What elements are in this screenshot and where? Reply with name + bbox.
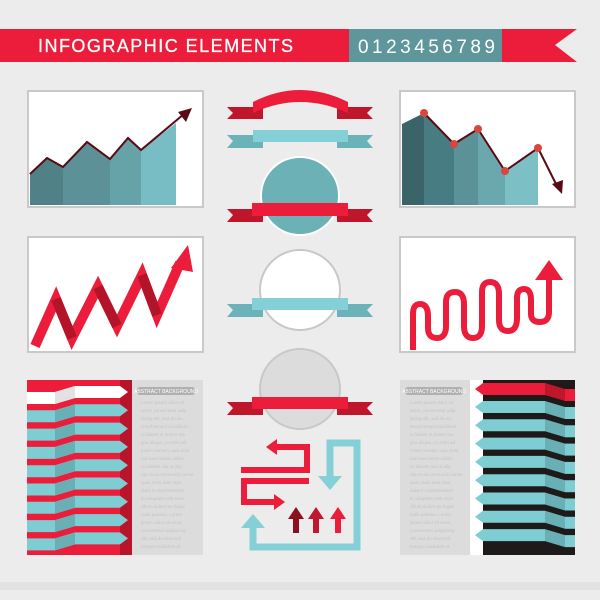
text block: right abstract background: tempor incididunt ut bbox=[410, 544, 450, 549]
numbers: 0123456789 bbox=[358, 37, 495, 58]
panel: falling area chart bbox=[400, 91, 575, 207]
text block: right abstract background: gna aliqua. Ut enim ad bbox=[410, 440, 456, 445]
text block: left abstract background: elit, sed do eiusmod bbox=[141, 536, 182, 541]
badge: teal circle with red ribbon bbox=[227, 157, 373, 235]
text block: right abstract background: iscing elit, sed do eiu bbox=[410, 416, 452, 421]
text block: left abstract background: in voluptate velit esse bbox=[141, 496, 185, 501]
text block: right abstract background: amet, consectetur adip bbox=[410, 408, 456, 413]
text block: left abstract background: amet, consectetur adip bbox=[141, 408, 187, 413]
panel: squiggle arrow bbox=[400, 237, 575, 352]
panel: right stacked arrows bbox=[470, 380, 575, 555]
text block: right abstract background: in voluptate velit esse bbox=[410, 496, 454, 501]
text block: left abstract background: gna aliqua. Ut enim ad bbox=[141, 440, 187, 445]
text block: left abstract background: Lorem ipsum dolor sit bbox=[141, 400, 185, 405]
text block: right abstract background: ABSTRACT BACKGROUND bbox=[402, 389, 466, 395]
text block: left abstract background: iscing elit, sed do eiu bbox=[141, 416, 183, 421]
text block: left abstract background: ABSTRACT BACKGROUND bbox=[134, 389, 198, 395]
arrows: flow diagram bbox=[241, 439, 357, 547]
panel: zigzag arrow bbox=[28, 237, 203, 352]
text block: right abstract background: cillum dolore eu fugiat bbox=[410, 504, 455, 509]
text block: left abstract background: nulla pariatur. Lorem bbox=[141, 512, 182, 517]
text block: right abstract background: Lorem ipsum dolor sit bbox=[410, 400, 454, 405]
text block: left abstract background: smod tempor incididunt bbox=[141, 424, 188, 429]
text block: left abstract background bbox=[132, 380, 203, 555]
badge: white circle with teal ribbon bbox=[227, 250, 373, 330]
text block: right abstract background: consectetur adipiscing bbox=[410, 528, 455, 533]
text block: left abstract background: tempor incididunt ut bbox=[141, 544, 181, 549]
ribbon: red arched bbox=[227, 90, 373, 119]
text block: right abstract background: nulla pariatur. Lorem bbox=[410, 512, 451, 517]
text block: left abstract background: uip ex ea commodo conse bbox=[141, 472, 194, 477]
text block: left abstract background: dolor in reprehenderit bbox=[141, 488, 185, 493]
text block: left abstract background: ipsum dolor sit amet, bbox=[141, 520, 183, 525]
text block: right abstract background: minim veniam, quis nost bbox=[410, 448, 459, 453]
text block: left abstract background: rud exercitation ullam bbox=[141, 456, 184, 461]
text block: right abstract background: co laboris nisi ut aliq bbox=[410, 464, 451, 469]
text block: right abstract background: uip ex ea commodo conse bbox=[410, 472, 463, 477]
text block: right abstract background: dolor in reprehenderit bbox=[410, 488, 454, 493]
ribbon: teal flat bbox=[227, 130, 373, 148]
title text: INFOGRAPHIC ELEMENTS bbox=[38, 36, 293, 56]
text block: right abstract background bbox=[400, 380, 470, 555]
text block: right abstract background: ut labore et dolore ma bbox=[410, 432, 454, 437]
text block: left abstract background: minim veniam, quis nost bbox=[141, 448, 190, 453]
text block: left abstract background: co laboris nisi ut aliq bbox=[141, 464, 182, 469]
text block: right abstract background: rud exercitation ullam bbox=[410, 456, 453, 461]
text block: right abstract background: ipsum dolor sit amet, bbox=[410, 520, 452, 525]
text block: right abstract background: smod tempor incididunt bbox=[410, 424, 457, 429]
text block: left abstract background: consectetur adipiscing bbox=[141, 528, 186, 533]
text block: left abstract background: ut labore et dolore ma bbox=[141, 432, 185, 437]
text block: right abstract background: elit, sed do eiusmod bbox=[410, 536, 451, 541]
panel: left stacked arrows bbox=[27, 380, 132, 555]
text block: left abstract background: cillum dolore eu fugiat bbox=[141, 504, 186, 509]
panel: rising area chart bbox=[28, 91, 203, 207]
title banner bbox=[0, 29, 577, 62]
text block: right abstract background: quat. Duis aute irure bbox=[410, 480, 451, 485]
badge: gray circle with red ribbon bbox=[227, 349, 373, 429]
text block: left abstract background: quat. Duis aute irure bbox=[141, 480, 182, 485]
